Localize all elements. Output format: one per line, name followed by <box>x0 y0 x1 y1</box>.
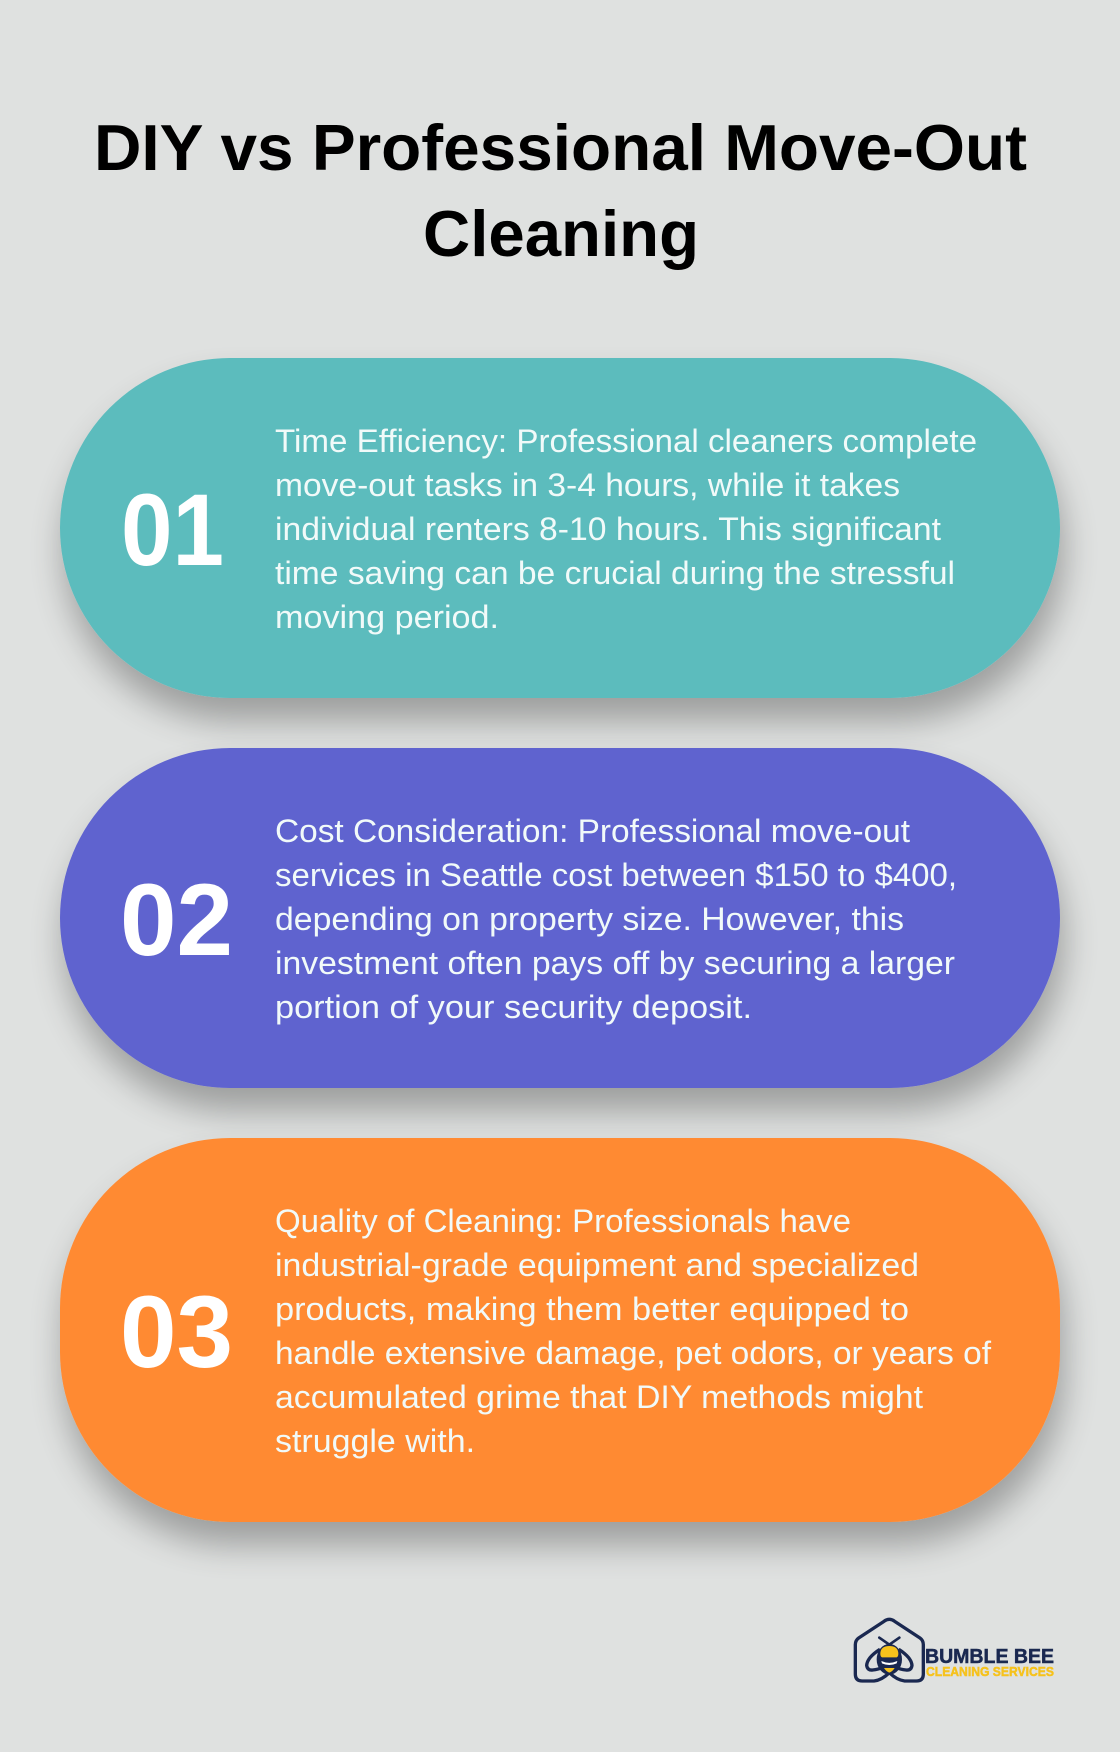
text: quality of cleaning: Quality of Cleaning: Professionals have <box>275 1203 851 1239</box>
title: Cleaning <box>423 197 699 270</box>
text: time efficiency: Time Efficiency: Professional cleaners complete <box>275 423 977 459</box>
logo: Bumble Bee Cleaning Services <box>855 1619 1054 1681</box>
panel: quality of cleaning <box>60 1138 1060 1522</box>
text: cost consideration: services in Seattle cost between $150 to $400, <box>275 857 957 893</box>
panel: time efficiency <box>60 358 1060 698</box>
panel background: orange pill <box>60 1138 1060 1522</box>
logo wordmark: BUMBLE BEE <box>925 1646 1054 1668</box>
text: quality of cleaning <box>275 1203 991 1459</box>
title: DIY vs Professional Move-Out <box>94 111 1027 184</box>
text: time efficiency: moving period. <box>275 599 499 635</box>
panel: cost consideration <box>60 748 1060 1088</box>
text: quality of cleaning: industrial-grade equipment and specialized <box>275 1247 919 1283</box>
icon: house with bee <box>855 1619 923 1681</box>
text: cost consideration: Cost Consideration: Professional move-out <box>275 813 910 849</box>
text: quality of cleaning: handle extensive damage, pet odors, or years of <box>275 1335 991 1371</box>
text: quality of cleaning: accumulated grime that DIY methods might <box>275 1379 923 1415</box>
panel background: teal pill <box>60 358 1060 698</box>
text: cost consideration: investment often pays off by securing a larger <box>275 945 955 981</box>
text: time efficiency: time saving can be crucial during the stressful <box>275 555 955 591</box>
title <box>94 111 1027 270</box>
text: quality of cleaning: struggle with. <box>275 1423 475 1459</box>
panel background: purple pill <box>60 748 1060 1088</box>
number 03: 03 <box>120 1275 233 1389</box>
text: cost consideration <box>275 813 957 1025</box>
text: time efficiency: move-out tasks in 3-4 hours, while it takes <box>275 467 900 503</box>
text: cost consideration: depending on property size. However, this <box>275 901 904 937</box>
text: cost consideration: portion of your security deposit. <box>275 989 752 1025</box>
number 02: 02 <box>120 863 233 977</box>
text: time efficiency <box>275 423 977 635</box>
logo tagline: CLEANING SERVICES <box>926 1664 1054 1679</box>
text: quality of cleaning: products, making them better equipped to <box>275 1291 909 1327</box>
number 01: 01 <box>121 473 224 587</box>
text: time efficiency: individual renters 8-10 hours. This significant <box>275 511 941 547</box>
